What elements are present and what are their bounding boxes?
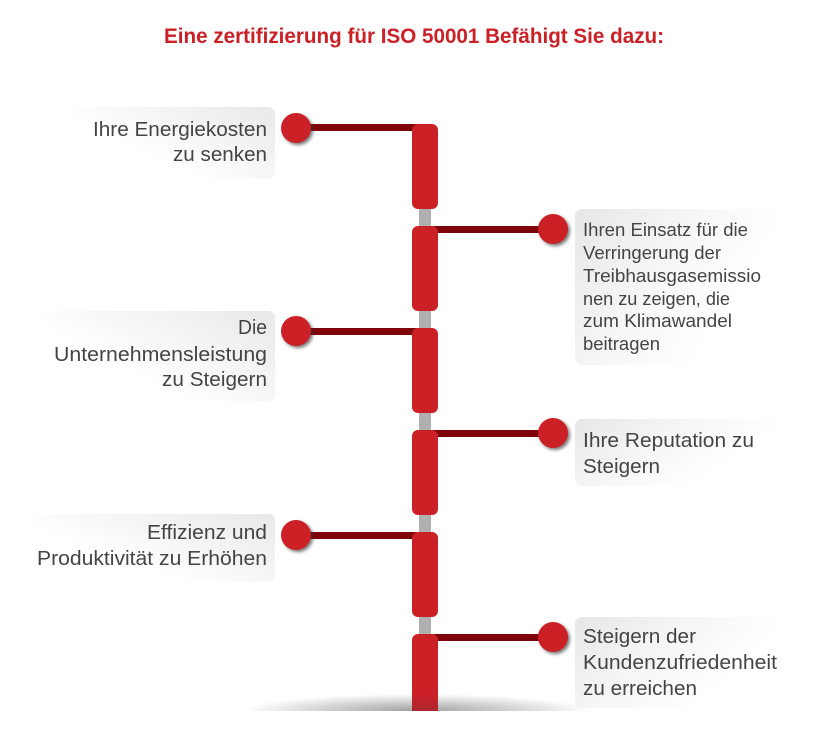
marker: Treibhausgasemissionen xyxy=(538,214,570,246)
callout: Treibhausgasemissionen: nen zu zeigen, die xyxy=(583,289,730,309)
callout: Treibhausgasemissionen: beitragen xyxy=(583,334,660,354)
timeline spine xyxy=(305,124,545,711)
callout: Treibhausgasemissionen: Verringerung der xyxy=(583,243,721,263)
red segments xyxy=(412,124,438,711)
title: Eine zertifizierung für ISO 50001 Befähigt Sie dazu: xyxy=(164,25,664,48)
callout: Kundenzufriedenheit: Steigern der xyxy=(583,626,696,648)
callout: Reputation: Steigern xyxy=(583,456,660,478)
callout: Unternehmensleistung xyxy=(45,311,275,401)
marker: Kundenzufriedenheit xyxy=(538,622,570,654)
callout: Effizienz: Produktivität zu Erhöhen xyxy=(37,548,267,570)
callout: Energiekosten: zu senken xyxy=(173,144,267,166)
callout: Energiekosten: Ihre Energiekosten xyxy=(93,119,267,141)
callout: Treibhausgasemissionen xyxy=(575,209,775,365)
callout: Kundenzufriedenheit xyxy=(575,617,780,708)
callout: Treibhausgasemissionen: zum Klimawandel xyxy=(583,311,732,331)
marker: Effizienz xyxy=(281,520,313,552)
callout: Effizienz xyxy=(30,514,275,582)
callout: Treibhausgasemissionen: Treibhausgasemissio xyxy=(583,266,761,286)
connector lines xyxy=(305,124,545,641)
callout: Reputation: Ihre Reputation zu xyxy=(583,430,754,452)
callout: Reputation xyxy=(575,419,775,486)
callout: Unternehmensleistung: Unternehmensleistung xyxy=(54,344,267,366)
ground shadow xyxy=(257,696,576,711)
callout: Unternehmensleistung: zu Steigern xyxy=(162,369,267,391)
marker: Energiekosten xyxy=(281,113,313,145)
callout: Effizienz: Effizienz und xyxy=(147,522,267,544)
callout: Kundenzufriedenheit: zu erreichen xyxy=(583,678,697,700)
marker: Reputation xyxy=(538,418,570,450)
callout: Treibhausgasemissionen: Ihren Einsatz für die xyxy=(583,220,748,240)
gray stem xyxy=(419,200,431,640)
marker: Unternehmensleistung xyxy=(281,316,313,348)
callout: Unternehmensleistung: Die xyxy=(238,317,267,339)
callout: Kundenzufriedenheit: Kundenzufriedenheit xyxy=(583,652,777,674)
callout: Energiekosten xyxy=(75,107,275,179)
